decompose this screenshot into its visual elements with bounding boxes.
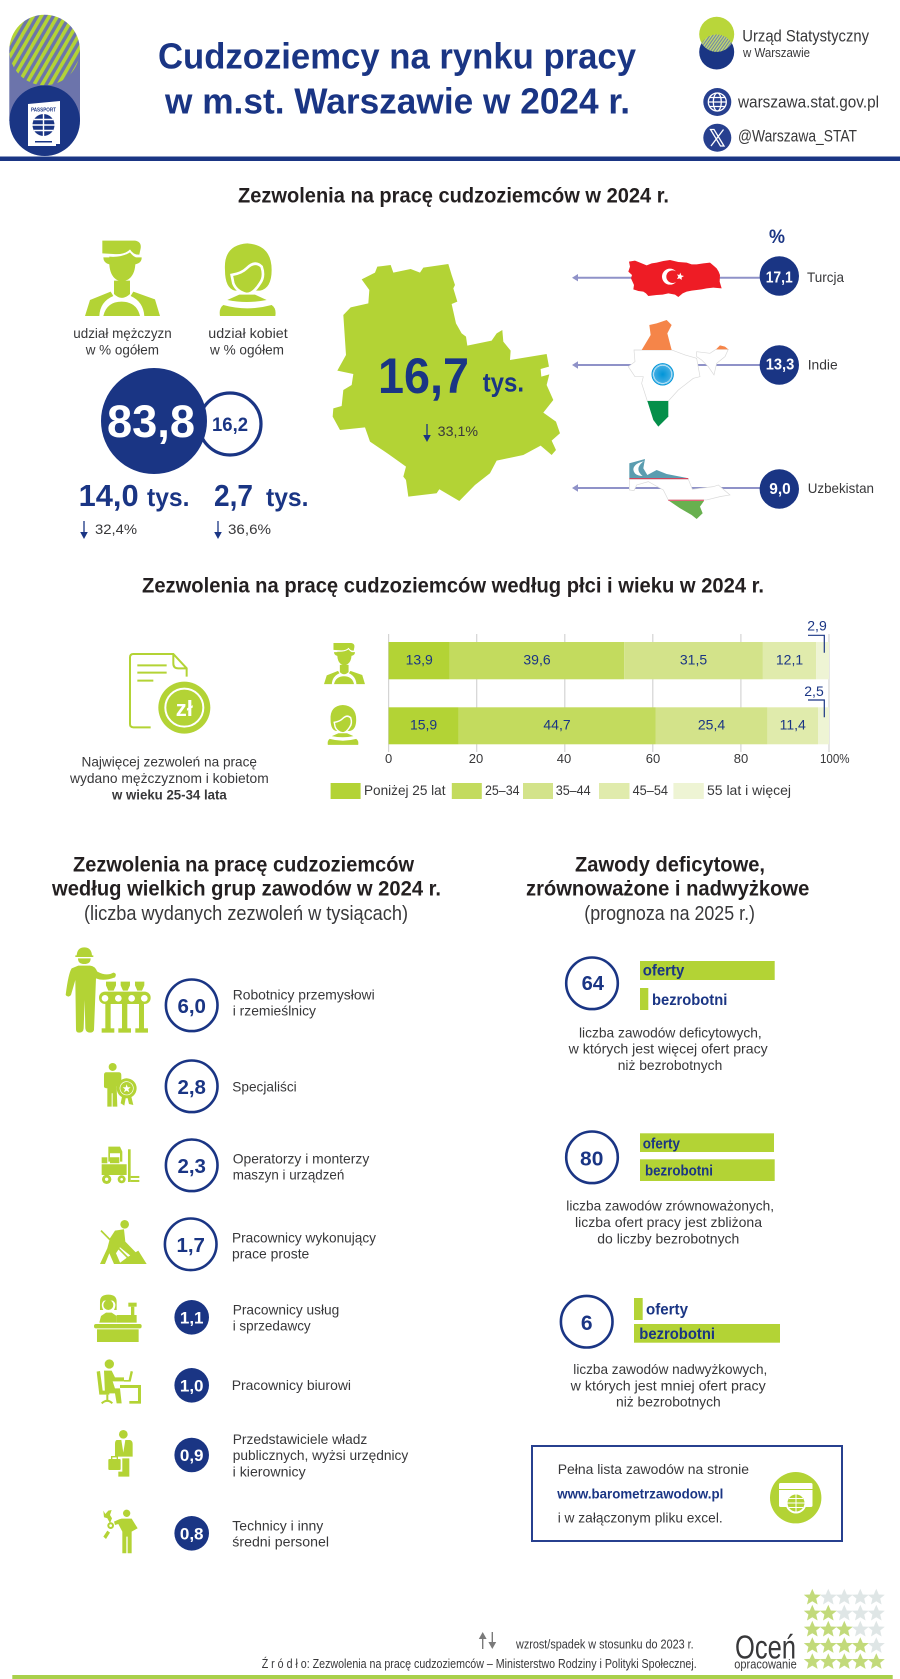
value: 80 [580, 1148, 603, 1170]
icon: cashier at desk [94, 1295, 142, 1342]
label [233, 1431, 408, 1480]
row: Turkey [628, 256, 844, 297]
map: Warsaw [333, 264, 560, 501]
label: men share: w % ogółem [85, 341, 159, 357]
callout: 2,5: 2,5 [804, 683, 824, 699]
icon: person with medal [104, 1063, 137, 1107]
callout: full occupation list: Pełna lista zawodów na stronie [558, 1461, 749, 1477]
value: 1,1 [180, 1308, 204, 1327]
value: 6 [581, 1312, 593, 1335]
row: specialists [104, 1060, 297, 1112]
legend [331, 782, 791, 799]
social link [703, 124, 857, 152]
label: women share: udział kobiet [208, 325, 288, 341]
row: office workers [97, 1359, 351, 1404]
axis labels: 20 [469, 751, 483, 766]
value: 0,9 [180, 1446, 204, 1465]
arrow lines [572, 274, 760, 492]
heading: Zezwolenia na pracę cudzoziemców w 2024 r. [238, 184, 669, 208]
value: 2,8 [177, 1076, 206, 1099]
percent unit: % [769, 227, 785, 248]
label: średni personel [232, 1534, 329, 1550]
axis labels: 40 [557, 751, 571, 766]
value: 17,1 [766, 269, 793, 286]
icon: man [85, 241, 160, 316]
label [233, 1301, 339, 1334]
icon: person with briefcase [108, 1430, 133, 1477]
label: prace proste [232, 1246, 310, 1262]
row: technicians [103, 1510, 329, 1553]
row: India [628, 320, 838, 427]
icon: document with zloty coin: zł [176, 696, 193, 721]
icon: digger with shovel [100, 1220, 147, 1264]
icon: person with wrench [103, 1510, 138, 1553]
stat: total 16,7 tys. [378, 348, 524, 442]
panel: shortage, balanced and surplus occupations [526, 854, 842, 1541]
icon: man small [324, 643, 365, 684]
row: elementary workers [100, 1218, 376, 1270]
row: machine operators [102, 1140, 369, 1191]
description [566, 1198, 774, 1247]
stat: women 2,7 tys.: 2,7 [214, 478, 253, 513]
circle: men share 83,8 [101, 368, 207, 474]
value [760, 345, 799, 385]
country name: Turcja [807, 269, 844, 285]
label: men share [73, 325, 172, 357]
heading [526, 854, 809, 925]
block: surplus occupations [561, 1296, 780, 1410]
bars: oferty [643, 963, 685, 980]
row: Uzbekistan [629, 459, 874, 519]
value: 1,0 [180, 1376, 204, 1395]
bar: men: 13,9 [406, 651, 433, 667]
bars: bezrobotni [645, 1163, 713, 1180]
website link [703, 88, 879, 116]
stacked bar chart [385, 618, 850, 766]
title: Cudzoziemcy na rynku pracy [158, 36, 636, 77]
label [233, 986, 375, 1019]
label: publicznych, wyżsi urzędnicy [233, 1447, 408, 1463]
label [232, 1229, 376, 1262]
description: liczba ofert pracy jest zbliżona [575, 1214, 762, 1230]
axis labels [385, 751, 850, 766]
value [166, 1060, 218, 1112]
icon: browser window with globe [770, 1472, 821, 1523]
text: most permits: w wieku 25-34 lata [111, 786, 227, 802]
website link: warszawa.stat.gov.pl [737, 93, 879, 112]
bars: oferty [643, 1135, 681, 1152]
stat: men 14,0 tys.: tys. [147, 482, 190, 512]
bar: women: 25,4 [698, 716, 725, 732]
axis labels: 100% [820, 751, 850, 766]
label [232, 1518, 329, 1550]
stat: total 16,7 tys.: tys. [483, 368, 524, 398]
icon: Turkey flag map [628, 260, 722, 297]
icon: Uzbekistan flag map [629, 459, 730, 519]
heading: Zezwolenia na pracę cudzoziemców według płci i wieku w 2024 r. [142, 574, 764, 597]
icon: document with zloty coin [130, 654, 210, 734]
heading: Zawody deficytowe, [575, 854, 765, 877]
icon: forklift [102, 1147, 139, 1184]
callout: full occupation list: i w załączonym pliku excel. [558, 1510, 723, 1526]
bars: bezrobotni [639, 1326, 715, 1343]
label: women share [208, 325, 288, 357]
label: i rzemieślnicy [233, 1003, 316, 1019]
legend: 35–44 [556, 782, 591, 798]
value: 0,8 [180, 1524, 204, 1543]
stat: men 14,0 tys.: 14,0 [79, 478, 139, 513]
legend: 25–34 [485, 782, 520, 798]
callout: 2,9: 2,9 [807, 618, 827, 634]
icon: woman [220, 243, 276, 316]
bars: bezrobotni [652, 992, 727, 1009]
value [760, 469, 799, 509]
legend: 55 lat i więcej [707, 782, 791, 798]
stat: total 16,7 tys.: 16,7 [378, 348, 469, 404]
description: liczba zawodów nadwyżkowych, [573, 1361, 767, 1377]
description [568, 1024, 768, 1073]
row: service and sales workers [94, 1295, 339, 1342]
description: liczba zawodów deficytowych, [579, 1024, 762, 1040]
icon: India flag map [628, 320, 728, 427]
icon: passport: PASSPORT [31, 108, 56, 114]
title [158, 36, 636, 122]
text: most permits: Najwięcej zezwoleń na pracę [82, 754, 257, 770]
heading: (liczba wydanych zezwoleń w tysiącach) [84, 903, 408, 925]
value: 13,3 [766, 357, 794, 374]
bar: men: 12,1 [776, 651, 803, 667]
icon: person at laptop [97, 1359, 141, 1404]
axis labels: 0 [385, 751, 392, 766]
circle: women share 16,2 [199, 393, 261, 455]
value [566, 958, 618, 1009]
icon: woman small [328, 705, 358, 745]
legend: change arrows: wzrost/spadek w stosunku do 2023 r. [515, 1637, 694, 1651]
icon: worker at conveyor [66, 947, 151, 1033]
value [165, 1218, 216, 1270]
value [561, 1296, 612, 1347]
value [174, 1300, 209, 1335]
value [166, 980, 218, 1031]
value: 9,0 [769, 481, 791, 498]
label [233, 1150, 369, 1182]
icon: passport [9, 15, 80, 156]
logo: Urząd Statystyczny: Urząd Statystyczny [742, 27, 869, 46]
stat: men 14,0 tys.: 32,4% [95, 521, 137, 537]
heading: (prognoza na 2025 r.) [584, 903, 755, 925]
panel: work permits overview [73, 184, 874, 539]
label: Robotnicy przemysłowi [233, 986, 375, 1002]
header [9, 15, 879, 156]
bars [634, 1298, 780, 1343]
logo: Urząd Statystyczny: w Warszawie [742, 46, 810, 60]
logo: Urząd Statystyczny [699, 17, 869, 70]
bar: men: 39,6 [523, 651, 551, 667]
callout: 2,9 [807, 618, 827, 653]
stat: women 2,7 tys. [214, 478, 308, 539]
panel: permits by occupation group [51, 854, 441, 1553]
bar: women [389, 707, 829, 744]
bars [640, 1133, 775, 1181]
block: shortage occupations [566, 958, 775, 1073]
legend: Poniżej 25 lat [364, 782, 446, 798]
callout: full occupation list: www.barometrzawodow.pl [556, 1485, 723, 1501]
bar: men [389, 642, 829, 679]
value [760, 256, 799, 296]
stat: women 2,7 tys.: 36,6% [228, 521, 271, 537]
label: Operatorzy i monterzy [233, 1150, 369, 1166]
label: Pracownicy biurowi [232, 1377, 351, 1393]
row: industrial workers [66, 947, 375, 1033]
label: Przedstawiciele władz [233, 1431, 367, 1447]
circle: women share 16,2: 16,2 [212, 415, 248, 436]
rating prompt [734, 1628, 797, 1671]
label: Pracownicy wykonujący [232, 1229, 376, 1245]
description: do liczby bezrobotnych [597, 1231, 739, 1247]
value: 1,7 [176, 1234, 205, 1257]
value: 6,0 [177, 995, 206, 1018]
bar: women: 11,4 [780, 716, 806, 732]
rating prompt: opracowanie [734, 1656, 797, 1671]
label: men share: udział mężczyzn [73, 325, 172, 341]
value [174, 1368, 209, 1403]
heading: Zezwolenia na pracę cudzoziemców [73, 854, 415, 877]
value [174, 1438, 209, 1472]
value: 2,3 [177, 1155, 206, 1178]
description: liczba zawodów zrównoważonych, [566, 1198, 774, 1214]
value [166, 1140, 218, 1191]
country name: Indie [808, 357, 838, 373]
description: niż bezrobotnych [618, 1057, 722, 1073]
block: balanced occupations [566, 1132, 775, 1247]
text: most permits: wydano mężczyznom i kobietom [69, 770, 269, 786]
value: 64 [582, 973, 605, 995]
rating prompt: Oceń [735, 1628, 796, 1665]
heading: według wielkich grup zawodów w 2024 r. [51, 878, 441, 901]
bar: women: 15,9 [410, 716, 437, 732]
bar: women: 44,7 [543, 716, 571, 732]
value [174, 1516, 209, 1551]
rating stars [804, 1589, 885, 1669]
axis labels: 60 [646, 751, 660, 766]
title: w m.st. Warszawie w 2024 r. [164, 81, 630, 122]
footer [262, 1589, 885, 1671]
description [570, 1361, 767, 1410]
bar: men: 31,5 [680, 651, 707, 667]
label: i kierownicy [233, 1464, 306, 1480]
description: w których jest więcej ofert pracy [568, 1041, 768, 1057]
stat: men 14,0 tys. [79, 478, 190, 539]
callout: full occupation list [532, 1446, 842, 1541]
callout: 2,5 [804, 683, 824, 717]
label: maszyn i urządzeń [233, 1166, 344, 1182]
stat: women 2,7 tys.: tys. [266, 482, 308, 512]
circle: men share 83,8: 83,8 [107, 396, 195, 447]
description: w których jest mniej ofert pracy [570, 1377, 766, 1393]
label: Specjaliści [232, 1079, 297, 1095]
heading [51, 854, 441, 925]
label: Technicy i inny [232, 1518, 323, 1534]
label: i sprzedawcy [233, 1318, 311, 1334]
heading: zrównoważone i nadwyżkowe [526, 878, 809, 901]
bars [640, 961, 775, 1010]
bars: oferty [646, 1301, 688, 1318]
label: Pracownicy usług [233, 1301, 339, 1317]
stat: total 16,7 tys.: 33,1% [438, 423, 478, 439]
source: Ź r ó d ł o: Zezwolenia na pracę cudzoziemców – Ministerstwo Rodziny i Polityki Społecznej. [262, 1656, 697, 1671]
label: women share: w % ogółem [209, 341, 284, 357]
panel: permits by sex and age [69, 574, 850, 802]
axis labels: 80 [734, 751, 748, 766]
row: managers [108, 1430, 408, 1480]
text: most permits [69, 754, 269, 802]
social link: @Warszawa_STAT [738, 127, 857, 146]
legend: 45–54 [633, 782, 668, 798]
country name: Uzbekistan [808, 480, 874, 496]
legend: change arrows [479, 1632, 694, 1651]
value [566, 1132, 618, 1183]
description: niż bezrobotnych [616, 1394, 721, 1410]
